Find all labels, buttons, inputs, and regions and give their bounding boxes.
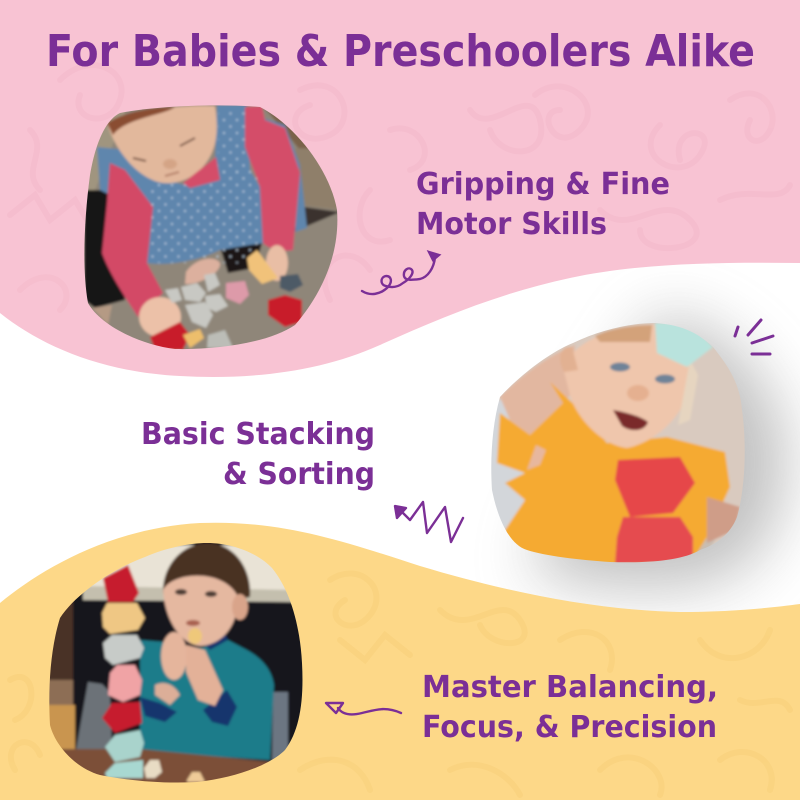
photo: boy balancing block tower — [45, 540, 307, 790]
arrow: curly arrow to the upper right — [362, 252, 439, 294]
panel: yellow bottom band — [0, 523, 800, 800]
text: master balancing, focus and precision — [422, 670, 718, 745]
photo shadow — [530, 315, 786, 588]
icon: burst lines — [735, 320, 773, 354]
photo: toddler with stacked red blocks — [488, 320, 750, 570]
arrow: wavy arrow to the left — [326, 703, 401, 714]
text: basic stacking and sorting: & Sorting — [223, 457, 375, 492]
arrow: zigzag arrow to the left — [395, 502, 463, 542]
text: gripping and fine motor skills — [416, 167, 670, 242]
text: basic stacking and sorting — [141, 417, 375, 492]
photo: baby gripping blocks — [80, 100, 342, 355]
text: gripping and fine motor skills: Motor Skills — [416, 207, 607, 242]
text: gripping and fine motor skills: Gripping & Fine — [416, 167, 670, 202]
text: master balancing, focus and precision: Focus, & Precision — [422, 710, 717, 745]
panel: pink top band — [0, 0, 800, 377]
text: master balancing, focus and precision: Master Balancing, — [422, 670, 718, 705]
text: basic stacking and sorting: Basic Stacking — [141, 417, 375, 452]
